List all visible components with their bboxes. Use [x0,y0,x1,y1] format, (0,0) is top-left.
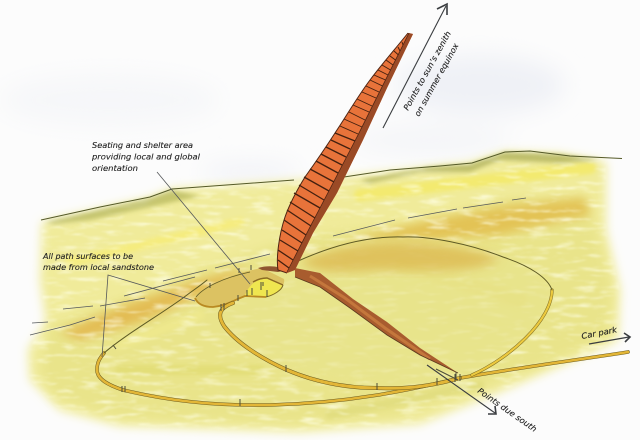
label: seating and shelter: providing local and global [91,152,201,162]
gnomon ribs [278,133,355,268]
contour dashes [30,198,526,335]
arrow: points due south [427,365,496,414]
label: seating and shelter [91,141,201,173]
label: sun's zenith: Points to sun’s zenith [402,30,453,112]
hill ridge [41,151,622,224]
fence posts [113,265,460,406]
label: points due south: Points due south [476,386,538,434]
ochre upper slope [345,198,590,240]
label: sun's zenith: on summer equinox [413,42,461,118]
label: path surfaces: All path surfaces to be [42,252,133,261]
label: path surfaces [42,252,154,272]
label: car park: Car park [581,325,618,341]
landscape field [28,152,620,432]
arrow: points to sun's zenith [383,4,447,128]
label: seating and shelter: orientation [92,164,138,173]
main lawn and seating mound [221,238,552,385]
leader: path surfaces [102,275,195,357]
sky wash [0,55,565,180]
footpaths [97,237,628,405]
label: seating and shelter: Seating and shelter area [92,141,193,150]
leader: seating area [157,172,250,284]
sail: lower shadow blade [295,268,458,380]
sail: inclined red gnomon [277,33,413,273]
inner loop path [220,303,460,388]
pale field streaks [28,152,620,432]
label: path surfaces: made from local sandstone [43,263,154,272]
long outer path [97,352,628,405]
field brush strokes [70,168,590,415]
seating and shelter area [195,266,288,307]
arrow: car park [589,333,630,344]
